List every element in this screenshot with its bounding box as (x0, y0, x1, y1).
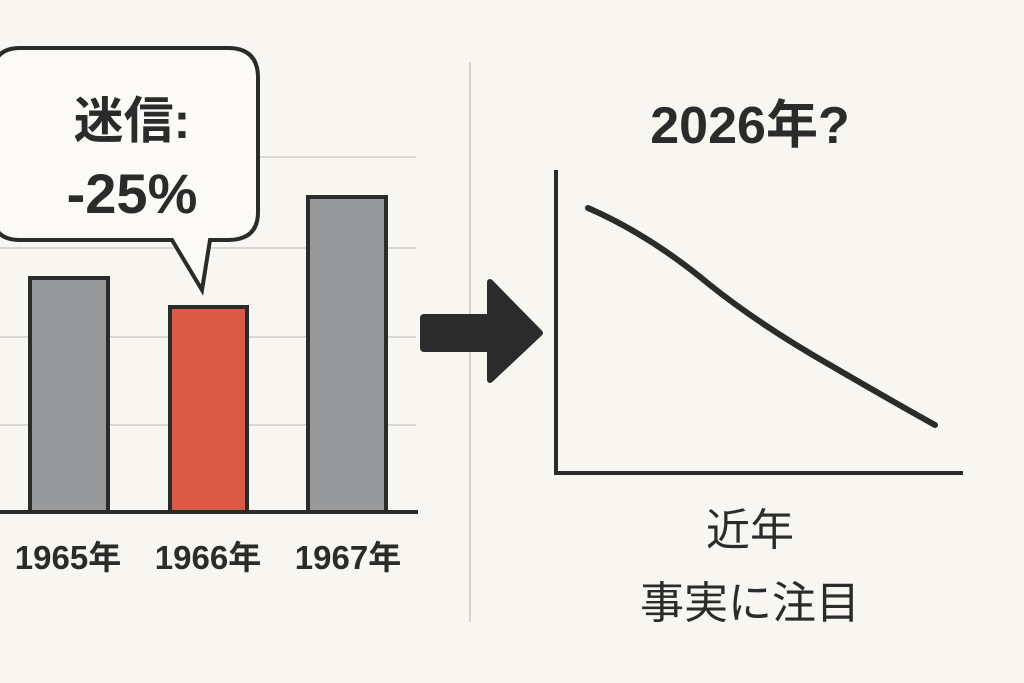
caption: 近年 (706, 506, 794, 555)
year labels: 1967年 (295, 539, 401, 576)
arrow (420, 282, 540, 380)
line chart (556, 170, 963, 473)
callout: speech bubble: -25% (67, 162, 197, 225)
year labels: 1965年 (15, 539, 121, 576)
title: 2026年?: 2026年? (650, 97, 850, 155)
bar chart (0, 197, 418, 512)
bar: 1967 (308, 197, 386, 512)
caption (640, 506, 860, 628)
year labels: 1966年 (155, 539, 261, 576)
bar: 1965 (30, 278, 108, 512)
caption: 事実に注目 (640, 579, 860, 628)
year labels (15, 539, 401, 576)
callout: speech bubble (0, 48, 258, 290)
bar: 1966 (170, 307, 247, 512)
callout: speech bubble: 迷信: (74, 93, 190, 149)
